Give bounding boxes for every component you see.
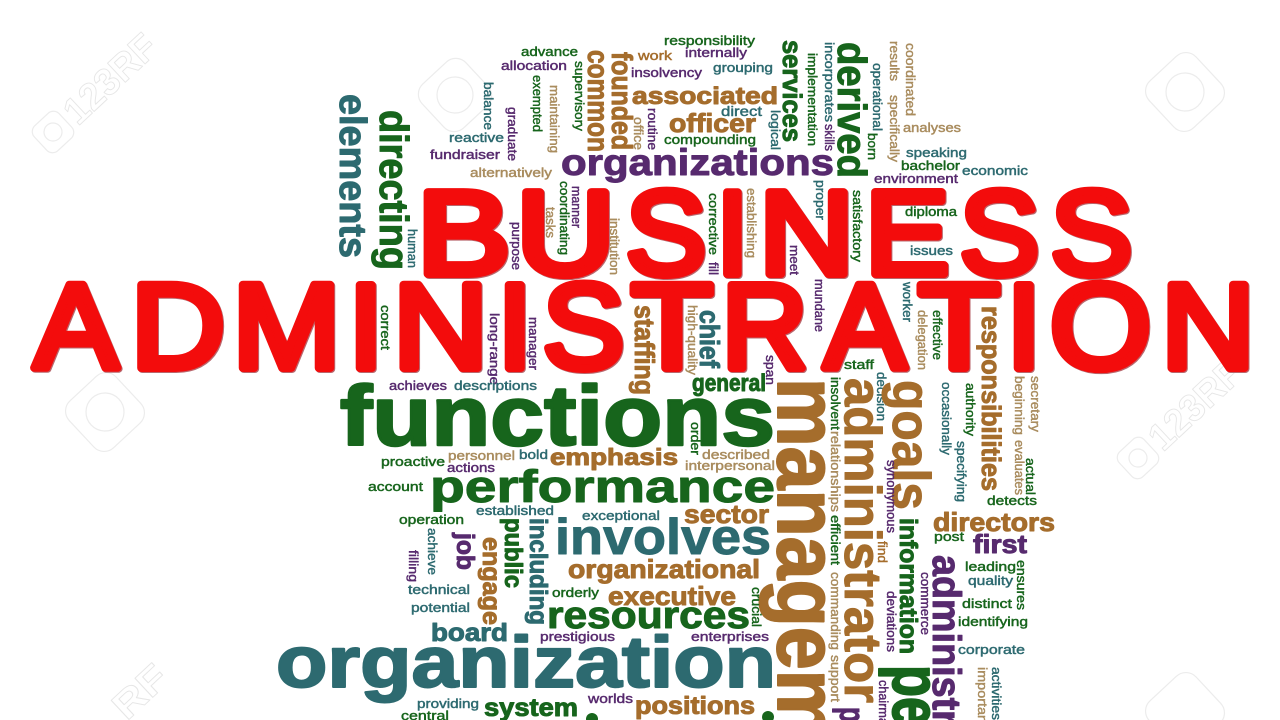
word cloud: upper cluster xyxy=(331,33,1029,275)
word cloud: lower cluster: specifying xyxy=(954,441,969,502)
word cloud: lower cluster: sector xyxy=(684,499,769,529)
word cloud: upper cluster: maintaining xyxy=(547,85,562,153)
word cloud: lower cluster: commanding xyxy=(828,572,843,650)
title: ADMINISTRATION: A xyxy=(824,258,906,394)
word cloud: upper cluster: manner xyxy=(569,186,584,229)
word cloud: upper cluster: reactive xyxy=(449,130,504,145)
word cloud: upper cluster: supervisory xyxy=(572,61,587,132)
watermarks: 123RF xyxy=(55,26,166,133)
word cloud: lower cluster: commerce xyxy=(918,572,933,635)
word cloud: upper cluster: derived xyxy=(829,42,875,178)
word cloud: upper cluster: diploma xyxy=(905,204,958,219)
word cloud: lower cluster: efficient xyxy=(828,515,843,565)
word cloud: lower cluster: ensures xyxy=(1014,560,1029,611)
word cloud: middle cluster between title lines: responsibilities xyxy=(976,306,1006,491)
word cloud: lower cluster: organizational xyxy=(568,554,760,584)
title: BUSINESS: I xyxy=(716,167,748,300)
word cloud: lower cluster: board xyxy=(431,619,508,647)
word cloud: lower cluster: crucial xyxy=(749,587,764,627)
word cloud: lower cluster: enterprises xyxy=(691,629,770,644)
watermarks: 123RF xyxy=(1140,352,1251,459)
word cloud: upper cluster: balance xyxy=(481,82,496,130)
word cloud: upper cluster: services xyxy=(777,40,807,142)
word cloud: upper cluster: issues xyxy=(910,243,954,258)
word cloud: lower cluster: involves xyxy=(555,509,771,565)
word cloud: lower cluster: technical xyxy=(408,582,470,597)
word cloud: upper cluster: exempted xyxy=(530,75,545,132)
word cloud: lower cluster: including xyxy=(524,518,552,625)
title: ADMINISTRATION: N xyxy=(393,258,488,394)
word cloud: lower cluster: insolvent xyxy=(828,377,843,430)
title: ADMINISTRATION: D xyxy=(131,258,225,394)
word cloud: lower cluster: support xyxy=(828,655,843,702)
word cloud: upper cluster: speaking xyxy=(906,145,967,160)
word cloud: lower cluster: important xyxy=(975,667,990,720)
word cloud: lower cluster: actual xyxy=(1023,458,1038,495)
word cloud: lower cluster: secretary xyxy=(1028,376,1043,433)
word cloud: upper cluster: tasks xyxy=(543,207,558,239)
word cloud: upper cluster: coordinating xyxy=(557,181,572,255)
word cloud: upper cluster: alternatively xyxy=(470,165,553,180)
title: ADMINISTRATION: I xyxy=(497,258,532,394)
word cloud: lower cluster: public xyxy=(499,518,527,588)
word cloud: lower cluster: performance xyxy=(430,461,775,512)
word cloud: upper cluster: elements xyxy=(331,94,373,258)
title: ADMINISTRATION: I xyxy=(1006,258,1041,394)
word cloud: lower cluster: administrator xyxy=(833,378,891,703)
title: BUSINESS: B xyxy=(417,167,510,300)
word cloud: lower cluster: synonymous xyxy=(884,460,899,533)
word cloud: upper cluster: routine xyxy=(645,108,660,150)
word cloud: lower cluster: personnel xyxy=(448,448,515,463)
title: ADMINISTRATION: S xyxy=(542,258,624,394)
title: BUSINESS: S xyxy=(960,167,1039,300)
word cloud: lower cluster: engage xyxy=(477,537,505,625)
word cloud: lower cluster: leading xyxy=(965,559,1016,574)
word cloud: lower cluster: potential xyxy=(411,600,470,615)
word cloud: upper cluster: coordinated xyxy=(903,43,918,116)
word cloud: lower cluster: proactive xyxy=(381,454,445,469)
word cloud: middle cluster between title lines: manager xyxy=(526,317,541,371)
title: ADMINISTRATION: N xyxy=(1161,258,1255,394)
word cloud: upper cluster: directing xyxy=(371,110,417,270)
title: BUSINESS: E xyxy=(865,167,949,300)
word cloud: lower cluster: distinct xyxy=(962,596,1012,611)
word cloud: lower cluster: resources xyxy=(547,595,750,637)
word cloud: lower cluster: exceptional xyxy=(582,508,660,523)
word cloud: lower cluster: identifying xyxy=(958,614,1028,629)
word cloud: lower cluster: decision xyxy=(874,372,889,421)
title: ADMINISTRATION: I xyxy=(348,258,383,394)
word cloud: lower cluster: orderly xyxy=(552,585,600,600)
word cloud: lower cluster: achieves xyxy=(389,378,448,393)
word cloud: upper cluster: work xyxy=(637,48,673,63)
word cloud: lower cluster: operation xyxy=(399,512,464,527)
title: BUSINESS: U xyxy=(516,167,615,300)
title: ADMINISTRATION: R xyxy=(722,258,808,394)
word cloud: upper cluster: specifically xyxy=(887,95,902,163)
word cloud: upper cluster: institution xyxy=(607,218,622,275)
word cloud: lower cluster: detects xyxy=(987,493,1038,508)
word cloud: lower cluster: account xyxy=(368,479,423,494)
word cloud: lower cluster: organization xyxy=(276,623,776,703)
title: BUSINESS xyxy=(417,167,1132,300)
title: BUSINESS: S xyxy=(626,167,706,300)
word cloud: lower cluster: actions xyxy=(447,460,496,475)
word cloud: lower cluster: information xyxy=(894,518,922,654)
word cloud: upper cluster: skills xyxy=(822,124,837,151)
word cloud: upper cluster: proper xyxy=(813,180,828,221)
word cloud: lower cluster: find xyxy=(875,541,890,563)
word cloud: upper cluster: common xyxy=(581,50,614,152)
word cloud: upper cluster: environment xyxy=(874,171,958,186)
word cloud: upper cluster: purpose xyxy=(509,222,524,270)
word cloud: lower cluster: occasionally xyxy=(939,382,954,456)
title: ADMINISTRATION: M xyxy=(232,258,341,394)
word cloud: lower cluster: worlds xyxy=(587,691,634,706)
word cloud: middle cluster between title lines: chief xyxy=(694,310,725,369)
word cloud: upper cluster: officer xyxy=(669,108,756,138)
word cloud: middle cluster between title lines: worker xyxy=(900,281,915,323)
word cloud: upper cluster: meet xyxy=(787,245,802,275)
word cloud: upper cluster: graduate xyxy=(505,107,520,161)
word cloud: upper cluster: human xyxy=(405,229,420,268)
word cloud: lower cluster: relationships xyxy=(828,431,843,513)
word cloud: upper cluster: organizations xyxy=(561,142,834,183)
word cloud: upper cluster: logical xyxy=(768,110,783,150)
title: ADMINISTRATION: T xyxy=(631,258,713,394)
word cloud: upper cluster: advance xyxy=(521,44,578,59)
word cloud: lower cluster: activities xyxy=(989,667,1004,720)
word cloud: lower cluster: job xyxy=(451,532,479,570)
word cloud: upper cluster: economic xyxy=(962,163,1029,178)
word cloud: upper cluster: insolvency xyxy=(631,65,703,80)
word cloud: lower cluster: interpersonal xyxy=(685,458,775,473)
word cloud: lower cluster: beginning xyxy=(1012,376,1027,435)
title: BUSINESS: N xyxy=(759,167,854,300)
word cloud: upper cluster: establishing xyxy=(744,188,759,258)
word cloud: middle cluster between title lines: high-quality xyxy=(685,305,700,376)
word cloud: upper cluster: responsibility xyxy=(664,33,756,48)
word cloud: lower cluster: bold xyxy=(519,447,548,462)
word cloud: middle cluster between title lines: delegation xyxy=(915,310,930,370)
word cloud: lower cluster: authority xyxy=(963,383,978,437)
word cloud: lower cluster: order xyxy=(688,422,703,456)
word cloud: lower cluster: post xyxy=(934,529,964,544)
title: ADMINISTRATION: O xyxy=(1050,258,1151,394)
word cloud: middle cluster between title lines: mundane xyxy=(812,279,827,332)
word cloud: lower cluster: positions xyxy=(635,692,755,720)
word cloud: upper cluster: satisfactory xyxy=(850,190,865,263)
word cloud: lower cluster: directors xyxy=(933,507,1055,537)
title: ADMINISTRATION: A xyxy=(34,258,118,394)
word cloud: lower cluster: providing xyxy=(417,696,479,711)
word cloud: middle cluster between title lines xyxy=(378,279,1006,491)
word cloud: lower cluster: deviations xyxy=(884,591,899,653)
word cloud: upper cluster: allocation xyxy=(501,58,567,73)
word cloud: middle cluster between title lines: correct xyxy=(378,305,393,350)
word cloud: middle cluster between title lines: span xyxy=(763,355,778,385)
word cloud: upper cluster: corrective xyxy=(706,193,721,255)
word cloud: lower cluster: executive xyxy=(608,581,736,611)
title: BUSINESS: S xyxy=(1050,167,1132,300)
word cloud: lower cluster: first xyxy=(973,529,1027,559)
word cloud: upper cluster: incorporates xyxy=(822,42,837,123)
word cloud: upper cluster: fill xyxy=(706,262,721,275)
word cloud: upper cluster: associated xyxy=(632,83,778,110)
word cloud: upper cluster: implementation xyxy=(805,53,820,146)
word cloud: upper cluster: analyses xyxy=(903,120,962,135)
word cloud: lower cluster: evaluates xyxy=(1012,440,1027,495)
word cloud: upper cluster: born xyxy=(865,133,880,160)
word cloud: lower cluster: described xyxy=(702,447,770,462)
word cloud: lower cluster: prestigious xyxy=(540,629,616,644)
word cloud: lower cluster: goals xyxy=(881,380,940,510)
word cloud: upper cluster: grouping xyxy=(713,60,773,75)
title: ADMINISTRATION: T xyxy=(918,258,1000,394)
word cloud: lower cluster: functions xyxy=(340,369,775,463)
word cloud: upper cluster: direct xyxy=(721,103,762,119)
title: ADMINISTRATION xyxy=(34,258,1255,394)
word cloud: upper cluster: bachelor xyxy=(901,158,961,173)
word cloud: middle cluster between title lines: staff xyxy=(844,357,874,372)
word cloud: middle cluster between title lines: effective xyxy=(930,310,945,360)
word cloud: upper cluster: office xyxy=(631,117,646,150)
word cloud: upper cluster: compounding xyxy=(664,132,756,147)
word cloud: middle cluster between title lines: long-range xyxy=(487,313,502,385)
word cloud: lower cluster: achieve xyxy=(425,528,440,575)
word cloud: upper cluster: results xyxy=(887,41,902,82)
word cloud: lower cluster: emphasis xyxy=(550,444,678,470)
word cloud: upper cluster: operational xyxy=(870,63,885,131)
word cloud: lower cluster: quality xyxy=(968,573,1014,588)
word cloud: middle cluster between title lines: staffing xyxy=(629,305,660,395)
word cloud: lower cluster: descriptions xyxy=(454,378,538,393)
word cloud: lower cluster: filling xyxy=(406,550,421,582)
word cloud: lower cluster: corporate xyxy=(958,642,1025,657)
word cloud: upper cluster: internally xyxy=(685,45,748,60)
word cloud: lower cluster: established xyxy=(476,503,554,518)
word cloud: upper cluster: fundraiser xyxy=(430,147,501,162)
word cloud: lower cluster: general xyxy=(692,370,766,397)
word cloud: lower cluster xyxy=(276,369,1055,720)
word cloud: upper cluster: founded xyxy=(605,52,637,150)
